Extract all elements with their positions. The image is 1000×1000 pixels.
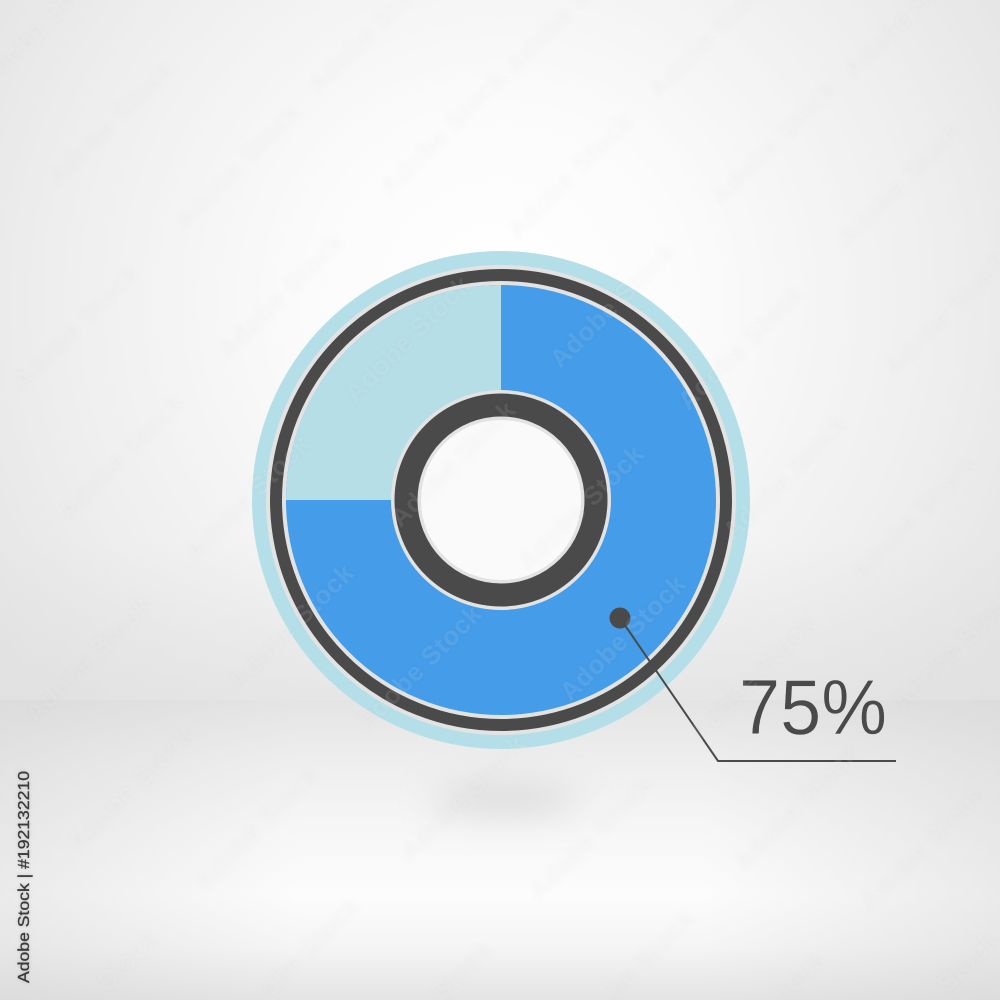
floor shadow under donut <box>430 786 580 814</box>
watermark pattern: Adobe Stock <box>705 74 843 212</box>
watermark pattern: Adobe Stock <box>844 449 982 587</box>
watermark pattern: Adobe Stock <box>717 408 855 546</box>
watermark pattern: Adobe Stock <box>522 769 660 907</box>
watermark pattern: Adobe Stock <box>832 115 970 253</box>
watermark pattern: Adobe Stock <box>62 720 200 858</box>
watermark pattern: Adobe Stock <box>179 429 317 567</box>
watermark pattern: Adobe Stock <box>19 590 157 728</box>
inner dark ring with light edges <box>406 405 596 595</box>
watermark pattern: Adobe Stock <box>188 759 326 897</box>
dark outer ring with light edges <box>276 275 726 725</box>
watermark pattern: Adobe Stock <box>512 439 650 577</box>
watermark pattern: Adobe Stock <box>52 388 190 526</box>
watermark pattern: Adobe Stock <box>374 64 512 202</box>
watermark pattern: Adobe Stock <box>350 599 488 737</box>
watermark pattern: Adobe Stock <box>42 54 180 192</box>
watermark pattern: Stock <box>91 923 164 996</box>
callout leader with dot <box>610 608 896 761</box>
watermark pattern: Adobe Stock <box>169 97 307 235</box>
watermark pattern: Adobe Stock <box>394 729 532 867</box>
stock id credit: Adobe Stock | #192132210 <box>16 771 33 983</box>
watermark pattern: obe Stock <box>253 890 366 1000</box>
percentage label: 75% <box>739 663 887 751</box>
watermark pattern: Adobe Stock <box>212 227 350 365</box>
watermark pattern: Adobe Stock <box>854 779 992 917</box>
outer pale blue ring <box>252 251 750 749</box>
watermark pattern: Adobe Stock <box>384 395 522 533</box>
watermark pattern: Adobe Stock <box>727 739 865 877</box>
watermark pattern: Adobe Stock <box>554 569 692 707</box>
watermark pattern: Adobe Stock <box>501 107 639 245</box>
watermark pattern: Adobe Stock <box>222 558 360 696</box>
25 percent pale segment <box>286 285 501 500</box>
watermark pattern: Adobe Stock <box>544 236 682 374</box>
75 percent blue segment <box>286 285 716 715</box>
watermark pattern: Adobe Stock <box>339 270 477 408</box>
watermark pattern: Adobe Stock <box>7 258 145 396</box>
donut chart <box>252 251 750 749</box>
watermark pattern: Adobe Stock <box>684 609 822 747</box>
watermark pattern: Adobe Stock <box>672 278 810 416</box>
